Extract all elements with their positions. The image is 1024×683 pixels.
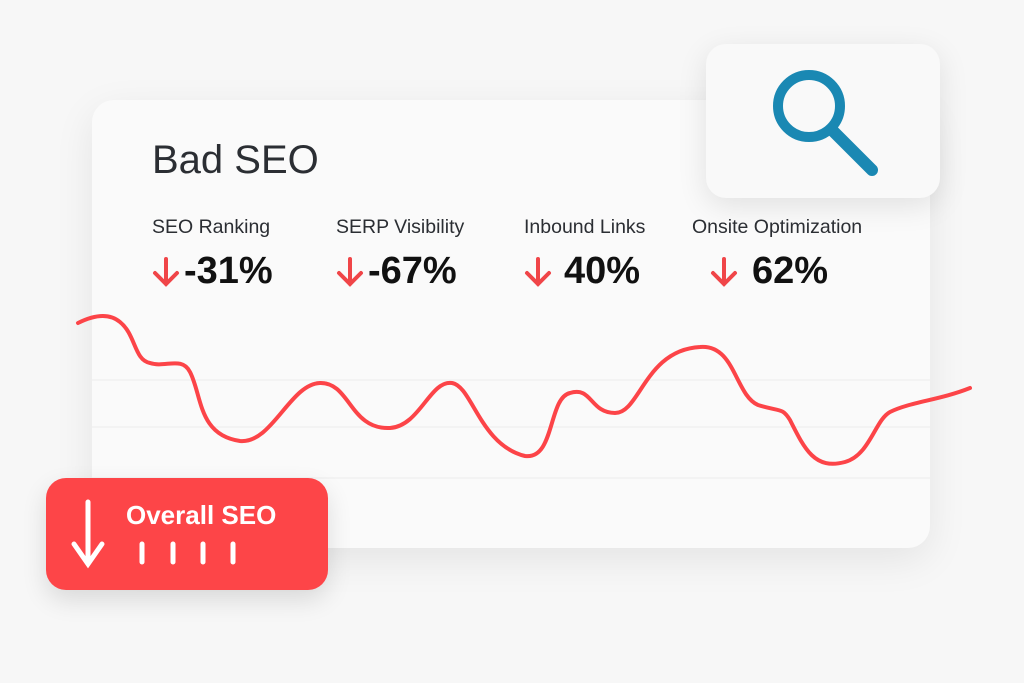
metric: Inbound Links: Inbound Links <box>524 216 645 238</box>
metric: SEO Ranking <box>152 216 273 292</box>
metric: Onsite Optimization: Onsite Optimization <box>692 216 862 238</box>
metric: Inbound Links: 40% <box>564 250 640 292</box>
metric: SEO Ranking: -31% <box>184 250 273 292</box>
metric: Inbound Links <box>524 216 645 292</box>
callout: Overall SEO badge <box>46 478 328 590</box>
panel: main card <box>92 100 930 548</box>
title: Bad SEO <box>152 138 319 182</box>
metric: SERP Visibility: SERP Visibility <box>336 216 464 238</box>
metric: Onsite Optimization <box>692 216 862 292</box>
metric: SERP Visibility <box>336 216 464 292</box>
metric: SEO Ranking: SEO Ranking <box>152 216 270 238</box>
icon: search box <box>706 44 940 198</box>
metric: SERP Visibility: -67% <box>368 250 457 292</box>
callout: Overall SEO badge: Overall SEO <box>126 500 276 530</box>
icon: down arrow <box>74 502 102 564</box>
metric: Onsite Optimization: 62% <box>752 250 828 292</box>
